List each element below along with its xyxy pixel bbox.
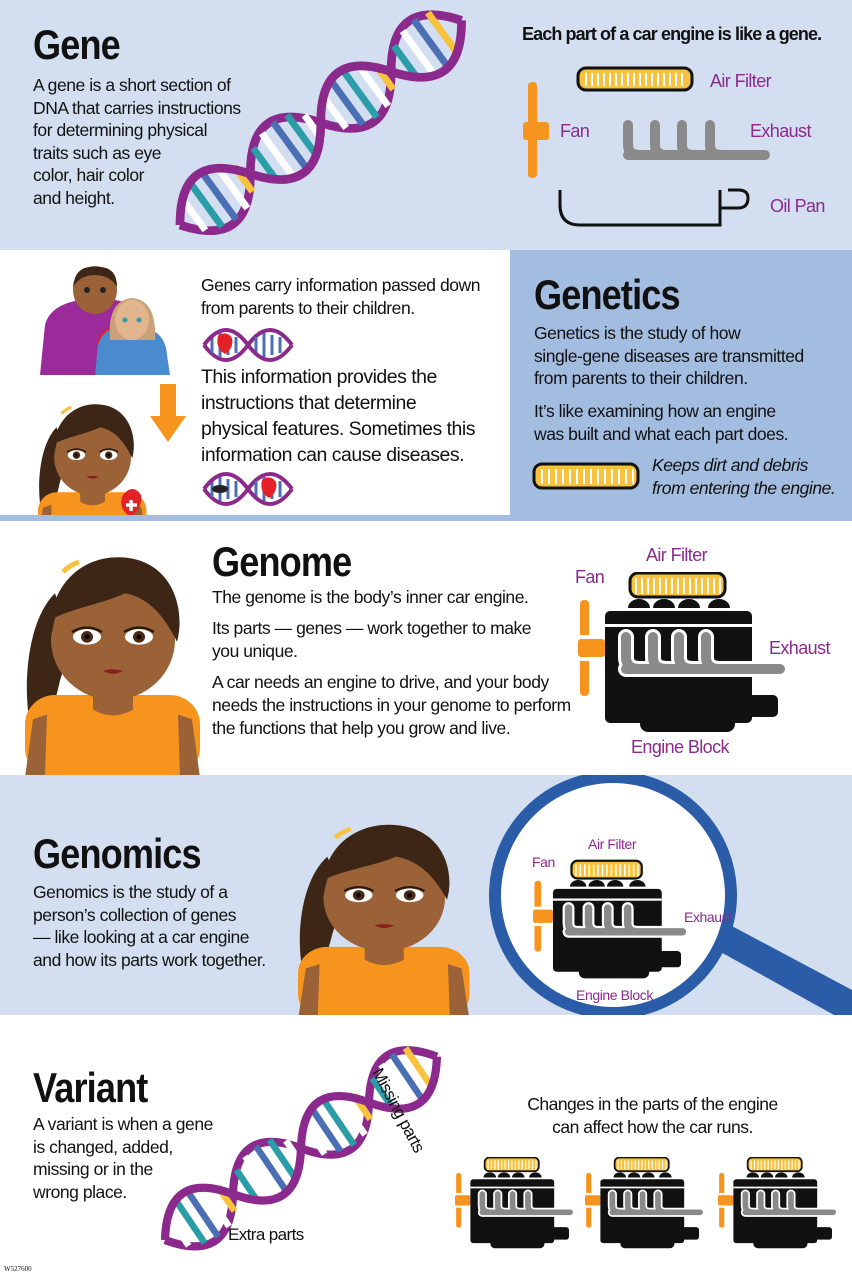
text: gene definition: A gene is a short section of [33,75,231,95]
panel: inheritance [0,250,510,520]
text: variant definition: is changed, added, [33,1136,173,1156]
text: genes carry information: Genes carry information passed down [201,275,480,295]
text: instructions: instructions that determine [201,392,416,414]
text: genomics definition [33,882,266,970]
label: Engine Block: Engine Block [576,987,653,1003]
text: instructions [201,366,475,466]
heading: car engine analogy: Each part of a car engine is like a gene. [522,24,821,44]
panel: genetics [510,250,852,520]
text: gene definition: for determining physical [33,120,207,140]
text: genome description: you unique. [212,641,298,661]
text: genomics definition: and how its parts work together. [33,950,266,970]
illustration: girl [298,824,470,1015]
text: genome description: needs the instructions in your genome to perform [212,695,571,715]
text: genome description: the functions that help you grow and live. [212,718,510,738]
label: Air Filter: Air Filter [710,71,771,91]
text: genome description: A car needs an engine to drive, and your body [212,672,549,692]
text: engine analogy [534,401,788,444]
diagram: engine [578,572,785,732]
text: gene definition: traits such as eye [33,142,161,162]
icon: engine variant 2 [585,1157,703,1248]
heading: Genomics: Genomics [33,830,201,877]
label: Exhaust: Exhaust [769,638,830,658]
text: genetics definition: Genetics is the study of how [534,323,740,343]
arrow: down [150,384,186,442]
label: Fan: Fan [575,567,604,587]
text: variant definition: missing or in the [33,1159,153,1179]
text: instructions: information can cause diseases. [201,444,464,466]
text: genomics definition: person’s collection of genes [33,904,236,924]
illustration: variant DNA [160,1046,441,1250]
text: genetics definition: single-gene diseases are transmitted [534,346,804,366]
text: genomics definition: Genomics is the study of a [33,882,228,902]
text: genome description [212,587,571,738]
icon: air filter [532,462,640,490]
label: Fan: Fan [560,121,589,141]
text: gene definition: and height. [33,188,115,208]
text: genes carry information [201,275,480,318]
illustration: parents [40,266,170,375]
text: gene definition: color, hair color [33,165,144,185]
text: genome description: The genome is the body’s inner car engine. [212,587,528,607]
label: Oil Pan: Oil Pan [770,196,825,216]
text: variant definition: A variant is when a gene [33,1114,213,1134]
label: Engine Block: Engine Block [631,737,729,757]
text: changes [527,1094,778,1137]
text: genome description: Its parts — genes — work together to make [212,618,531,638]
illustration: girl [25,557,200,775]
text: engine analogy: was built and what each part does. [534,424,788,444]
text: keeps dirt [652,455,835,498]
text: variant definition [33,1114,213,1202]
label: Air Filter: Air Filter [588,836,636,852]
text: gene definition [33,75,241,208]
panel: variant [0,1015,852,1280]
icon: engine variant 1 [455,1157,573,1248]
icon: mini DNA [202,328,294,362]
text: code: W527600 [4,1265,32,1273]
icon: mini DNA 2 [202,472,294,506]
label: Air Filter: Air Filter [646,545,707,565]
heading: Genetics: Genetics [534,271,680,318]
text: keeps dirt: Keeps dirt and debris [652,455,808,475]
heading: Gene: Gene [33,21,120,68]
text: gene definition: DNA that carries instructions [33,98,241,118]
text: changes: can affect how the car runs. [552,1117,753,1137]
text: genetics definition [534,323,804,388]
text: engine analogy: It’s like examining how an engine [534,401,776,421]
illustration: daughter [38,404,146,515]
label: Exhaust: Exhaust [750,121,811,141]
text: genomics definition: — like looking at a car engine [33,927,249,947]
text: genes carry information: from parents to their children. [201,298,415,318]
text: instructions: physical features. Sometimes this [201,418,475,440]
heading: Genome: Genome [212,538,351,585]
illustration: magnifying glass [489,775,852,1015]
heading: Variant: Variant [33,1064,147,1111]
label: Missing parts: Missing parts [368,1065,428,1155]
panel: genomics [0,775,852,1015]
label: Extra parts: Extra parts [228,1225,304,1244]
text: keeps dirt: from entering the engine. [652,478,835,498]
illustration: DNA helix [176,10,466,235]
text: variant definition: wrong place. [33,1182,127,1202]
panel: gene [0,0,852,250]
label: Exhaust: Exhaust [684,909,732,925]
label: Fan: Fan [532,854,555,870]
panel: genome [0,521,852,775]
icon: engine variant 3 [718,1157,836,1248]
text: changes: Changes in the parts of the engine [527,1094,778,1114]
text: instructions: This information provides the [201,366,437,388]
text: genetics definition: from parents to their children. [534,368,748,388]
diagram: engine parts [523,66,770,226]
